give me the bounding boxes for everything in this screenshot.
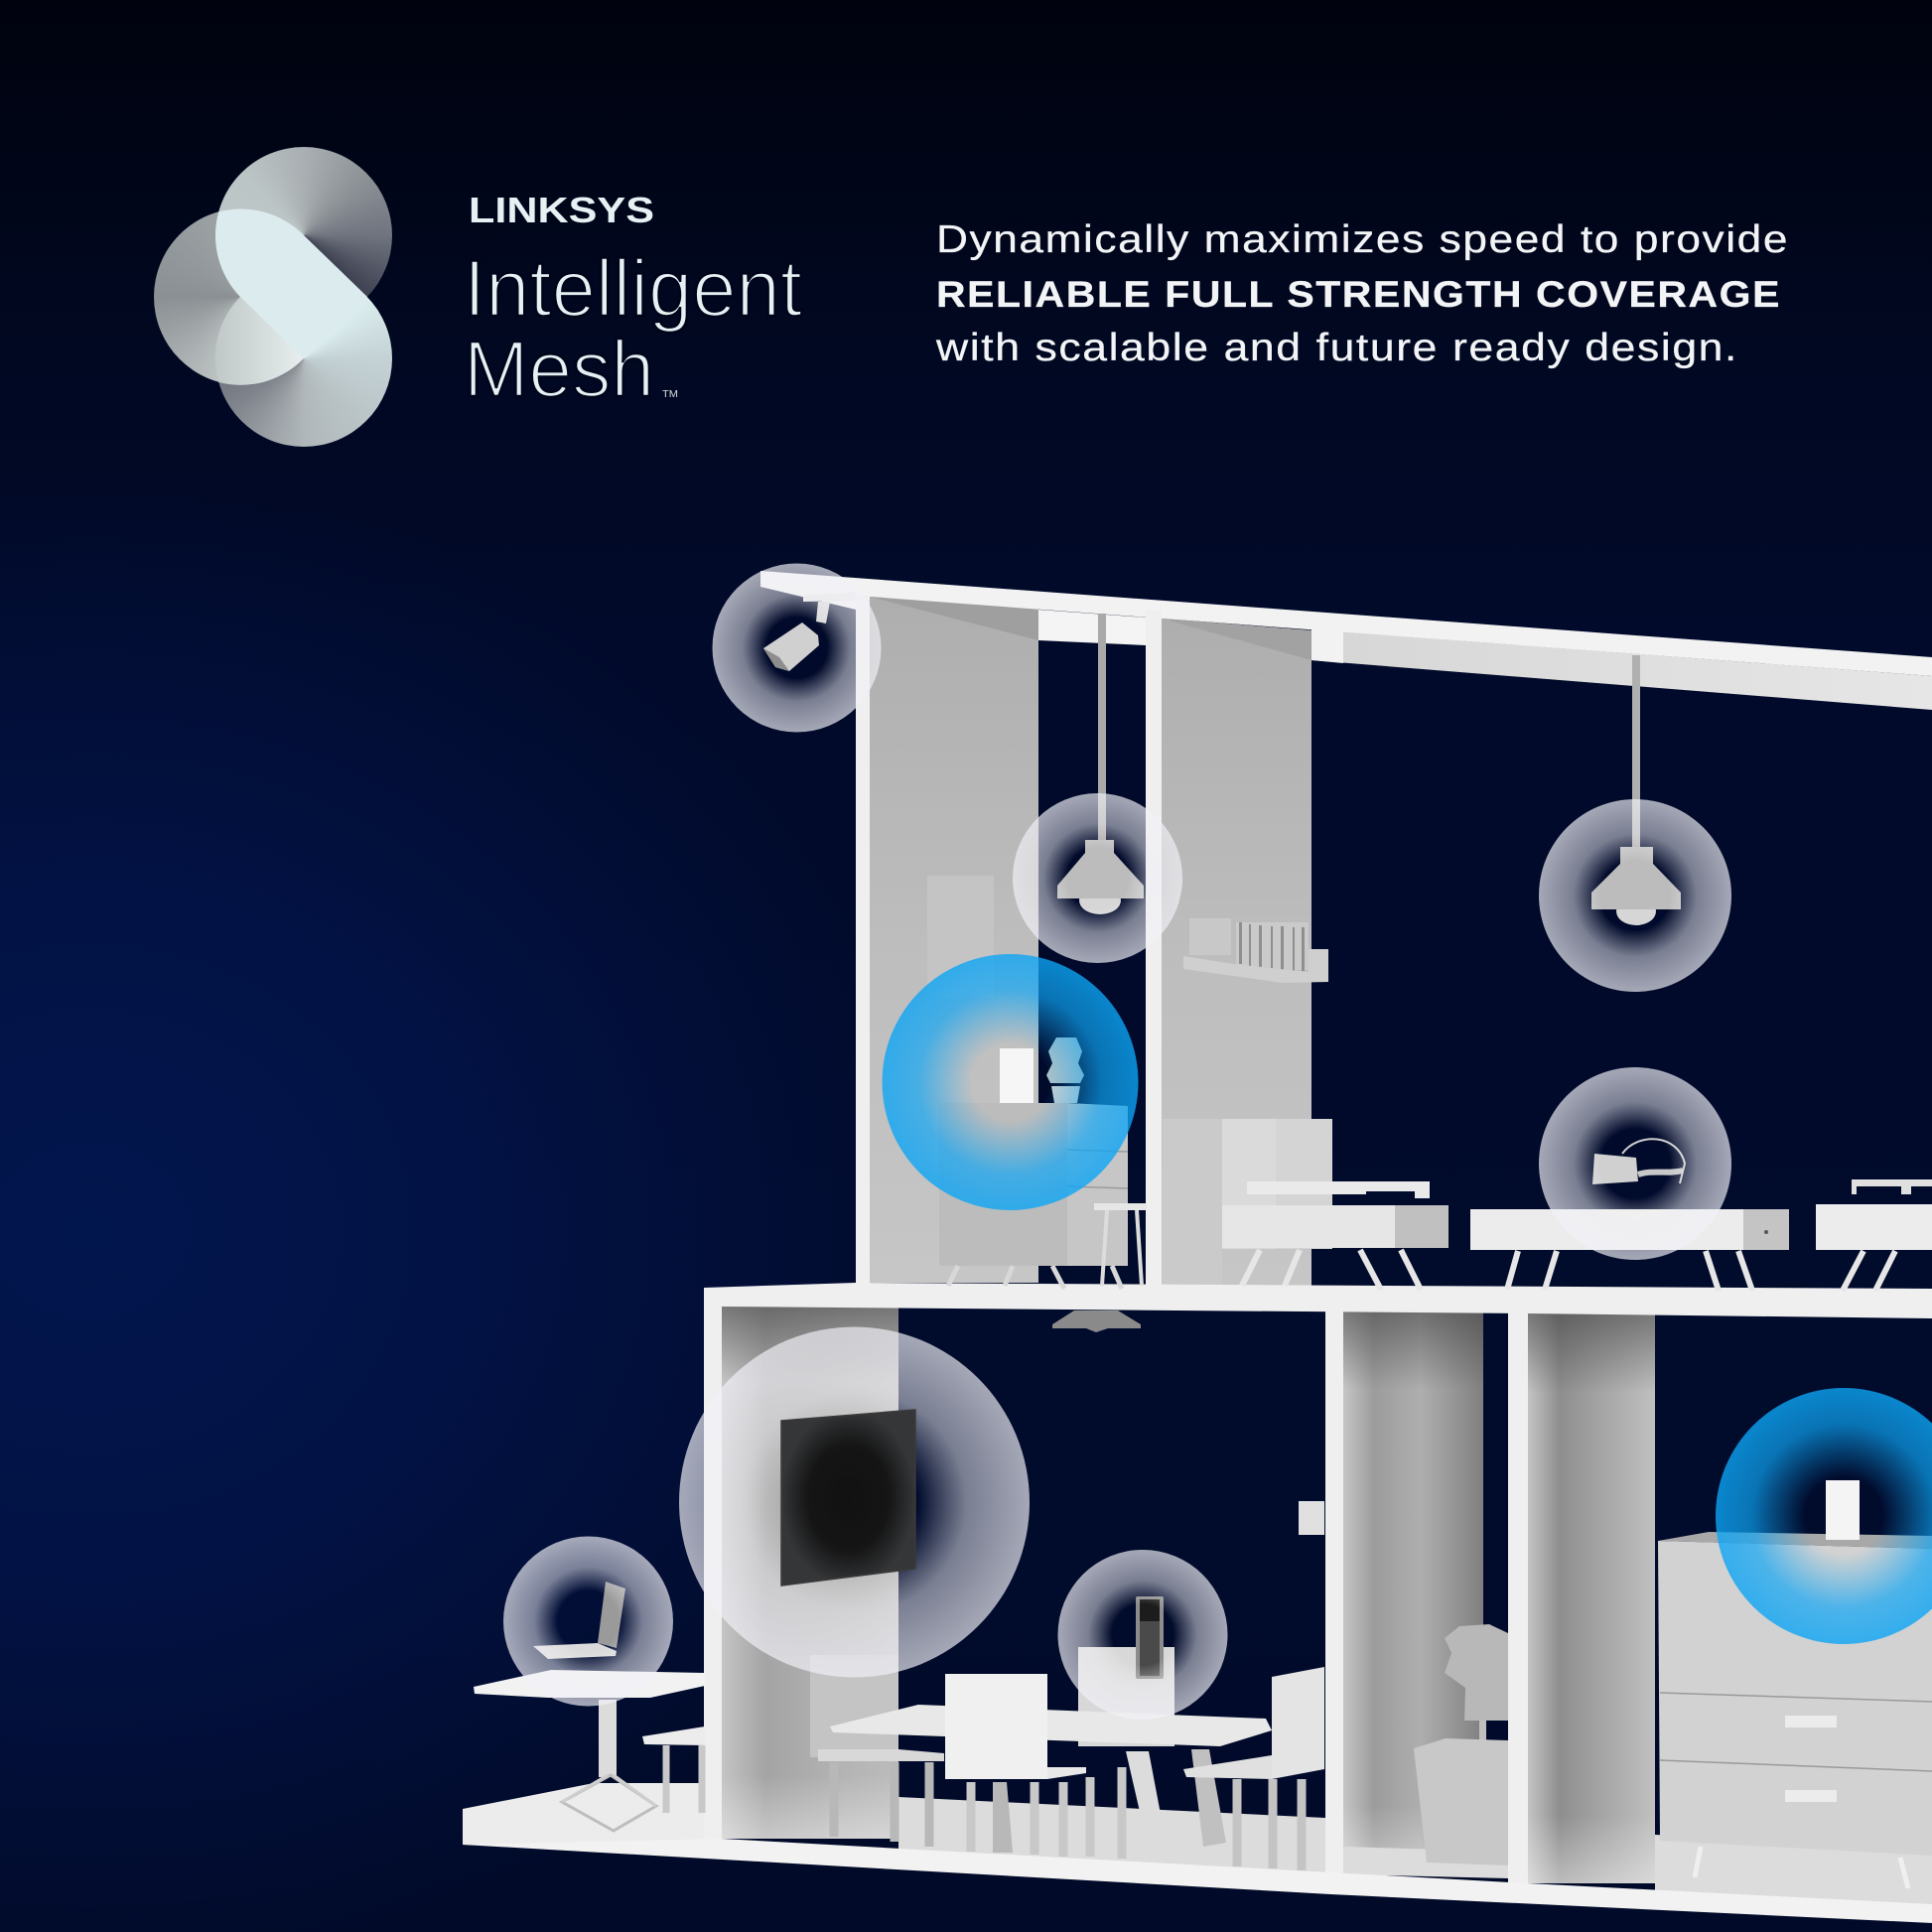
tagline	[935, 218, 1789, 369]
icon: mesh router upstairs	[1000, 1048, 1034, 1103]
icon: wall TV	[781, 1410, 915, 1586]
icon: VR headset	[1592, 1139, 1685, 1184]
dining back chair	[1078, 1647, 1174, 1746]
lounge chair	[1222, 1119, 1430, 1249]
upper cabinet	[939, 1103, 1128, 1289]
right table	[1816, 1179, 1932, 1291]
wall stub	[1299, 1501, 1324, 1535]
icon: pendant lamp one	[1057, 614, 1144, 914]
upper walls	[856, 596, 1162, 1291]
blue signal circle: downstairs router	[1716, 1388, 1932, 1644]
icon: mesh router downstairs	[1826, 1480, 1860, 1540]
middle floor slab	[704, 1283, 1932, 1320]
terrace	[463, 1783, 705, 1853]
signal circle: smartphone	[1058, 1550, 1227, 1720]
dining right chair	[1183, 1667, 1324, 1870]
stool upstairs	[1094, 1203, 1147, 1286]
tagline: with scalable and future ready design.	[935, 327, 1738, 369]
dining front chair	[945, 1674, 1122, 1859]
ground slab	[463, 1839, 1932, 1923]
tagline: RELIABLE FULL STRENGTH COVERAGE	[936, 274, 1781, 315]
dresser	[1658, 1532, 1932, 1888]
icon: smartphone	[1136, 1596, 1164, 1679]
potted plant downstairs	[1414, 1624, 1508, 1865]
signal circle: VR headset	[1539, 1067, 1731, 1260]
ceiling lamp below slab	[1052, 1311, 1141, 1332]
tagline: Dynamically maximizes speed to provide	[936, 218, 1789, 261]
long table	[1470, 1209, 1789, 1291]
blue signal circle: upstairs router	[882, 954, 1138, 1210]
left console table	[1222, 1205, 1449, 1290]
wall shelf with books	[1183, 918, 1328, 983]
product name: Mesh: Mesh	[464, 325, 654, 413]
signal circle: TV	[679, 1326, 1030, 1678]
terrace table	[474, 1670, 705, 1831]
signal circle: lamp two	[1539, 799, 1731, 992]
lower walls	[704, 1288, 1528, 1898]
logo mark: three overlapping discs forming an S	[154, 147, 392, 447]
icon: potted plant upstairs	[1046, 1037, 1084, 1103]
signal circle: laptop	[503, 1537, 673, 1706]
trademark mark: TM	[662, 389, 678, 400]
icon: pendant lamp two	[1591, 655, 1681, 925]
lower floor back panels	[722, 1307, 1655, 1883]
product name: Intelligent: Intelligent	[464, 244, 802, 334]
icon: security camera	[763, 592, 856, 671]
brand wordmark: Linksys: LINKSYS	[469, 190, 654, 230]
dining left chair	[810, 1655, 944, 1847]
roof beam	[760, 571, 1932, 710]
dining table	[830, 1705, 1272, 1853]
interior floors	[898, 1797, 1932, 1906]
icon: laptop	[533, 1582, 625, 1659]
signal circle: camera	[713, 564, 882, 733]
upper floor back panels	[870, 597, 1311, 1286]
signal circle: lamp one	[1013, 793, 1182, 963]
terrace stool	[642, 1726, 705, 1813]
